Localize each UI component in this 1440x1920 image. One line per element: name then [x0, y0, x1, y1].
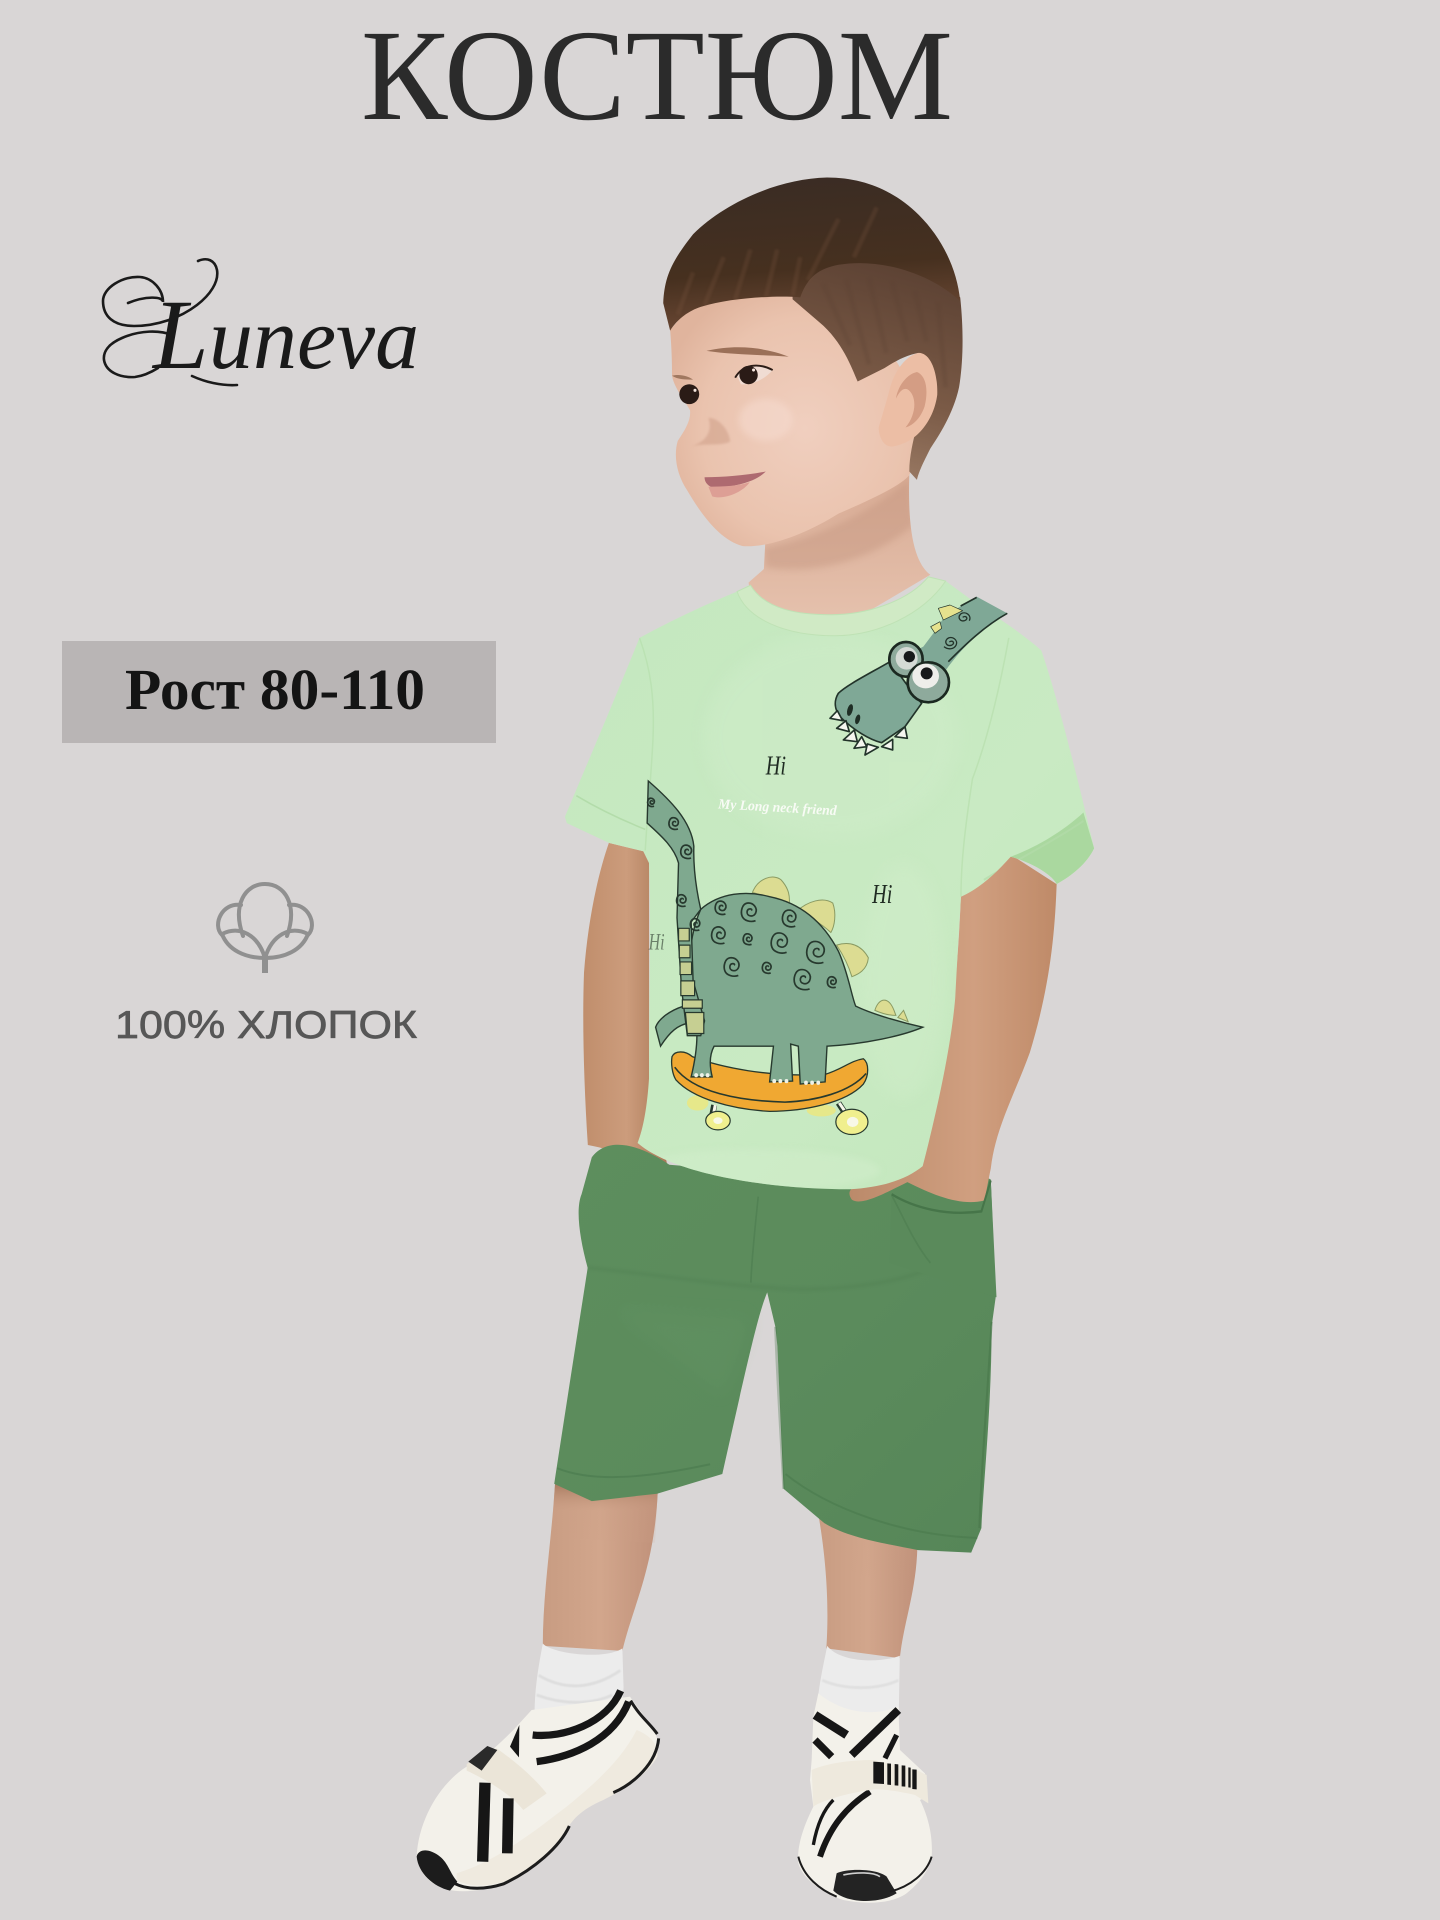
shirt body: [565, 577, 1094, 1189]
jaw shadow on neck: [764, 479, 913, 569]
height badge: [62, 641, 496, 743]
left sneaker: [417, 1691, 659, 1891]
logo: Luneva: [103, 259, 419, 390]
right arm and hand: [849, 855, 1057, 1202]
upper stripes: [815, 1715, 847, 1735]
print: skateboard: [672, 1052, 868, 1135]
ear: [879, 353, 937, 447]
logo: Luneva: L: [151, 279, 209, 390]
head: [663, 178, 963, 569]
shirt shading: [576, 636, 1094, 1191]
print: top dinosaur: [830, 597, 1007, 755]
toes: [694, 1073, 820, 1085]
shorts hem stitches: [557, 1464, 977, 1538]
legs and socks: [535, 1484, 917, 1724]
shorts: [554, 1145, 996, 1553]
fringe streaks: [678, 207, 877, 315]
sole band: [457, 1730, 657, 1885]
neck bands: [679, 928, 704, 1034]
strap: [467, 1748, 547, 1810]
shorts center seam: [751, 1197, 758, 1283]
t-shirt: [565, 577, 1094, 1191]
print: bottom dinosaur: [647, 781, 923, 1085]
print: Hi text: Hi: [648, 930, 665, 955]
boy in dinosaur outfit: [417, 178, 1094, 1903]
collar stripes: [533, 1691, 629, 1762]
eyebrows: [706, 347, 789, 357]
cheek highlight: [739, 399, 793, 441]
print: slogan: My Long neck friend: [717, 796, 838, 819]
tail-end curl: [656, 1006, 689, 1046]
title: КОСТЮМ: [361, 4, 953, 148]
left arm: [583, 843, 670, 1179]
right sneaker: [798, 1693, 932, 1903]
right leg: [818, 1513, 917, 1658]
mouth: [705, 471, 766, 497]
face: [670, 284, 916, 546]
lower stripes: [813, 1800, 833, 1845]
shorts shading: [612, 1307, 751, 1396]
upper hair: [663, 178, 960, 331]
strap: [812, 1760, 928, 1807]
top dinosaur teeth: [830, 711, 907, 755]
top dinosaur head: [835, 662, 922, 743]
barcode tab: [873, 1762, 917, 1789]
body swirls: [648, 798, 836, 990]
sole black edge: [453, 1701, 659, 1888]
print: Hi text: [648, 752, 892, 955]
logo: Luneva: uneva: [209, 291, 419, 388]
left eye: [679, 384, 699, 404]
nose shadow: [691, 418, 730, 447]
top dinosaur nostrils: [846, 704, 854, 716]
neck: [749, 475, 930, 625]
leg shade under shorts: [551, 1484, 917, 1592]
print: Hi text: Hi: [871, 880, 892, 910]
top dinosaur eyes: [889, 642, 923, 677]
icon: cotton boll: [218, 884, 312, 973]
print: Hi text: Hi: [765, 752, 786, 781]
body: [689, 893, 923, 1084]
left sock: [535, 1643, 624, 1724]
toe and sole: [833, 1870, 897, 1901]
right eye: [735, 366, 773, 384]
right pocket edge: [890, 1180, 996, 1297]
left leg: [543, 1484, 658, 1651]
top dinosaur spikes and swirls: [931, 605, 963, 633]
toe stripes: [483, 1783, 485, 1862]
hair side streaks: [823, 278, 946, 387]
collar rib: [737, 577, 946, 636]
lower hair: [793, 253, 963, 480]
back spikes: [752, 877, 908, 1022]
cotton label: 100% ХЛОПОК: [115, 1004, 417, 1047]
top dinosaur neck: [910, 597, 1007, 683]
height badge: Рост 80-110: [125, 657, 425, 722]
long neck: [647, 781, 705, 1036]
toe cap: [417, 1850, 457, 1891]
right sock: [816, 1646, 900, 1724]
